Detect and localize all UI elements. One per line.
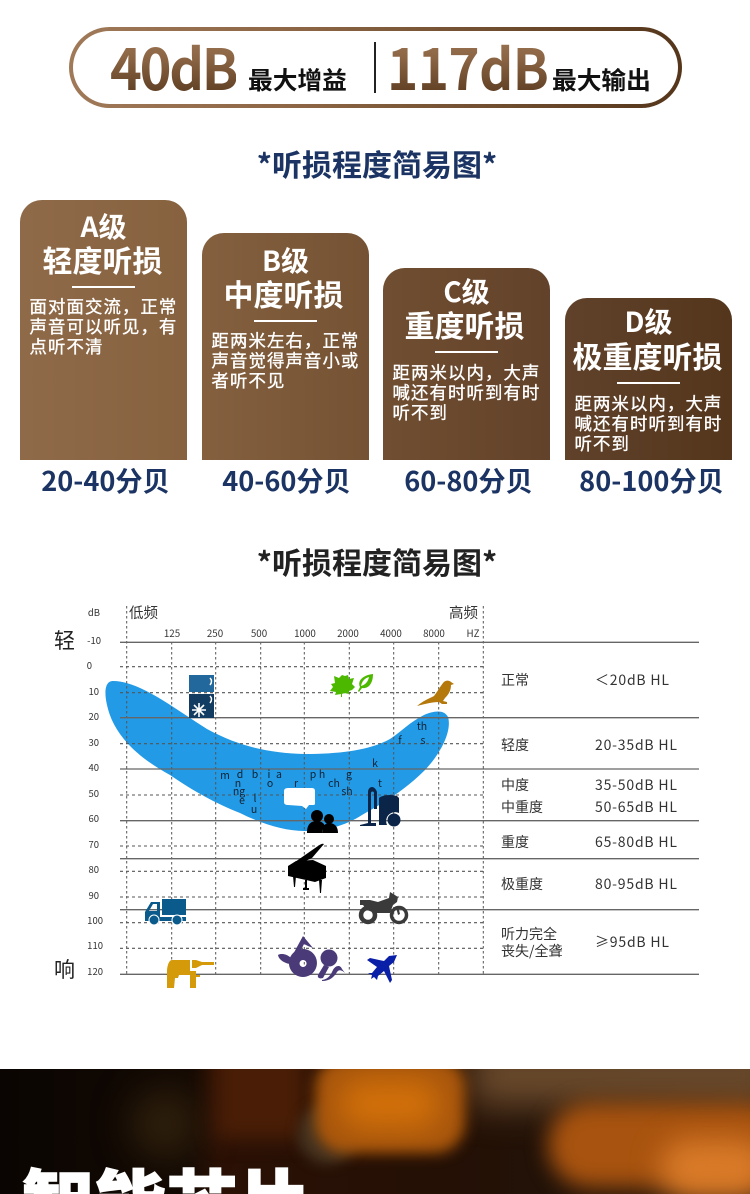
phonemes: a	[276, 767, 282, 782]
axis labels: frequency: 1000	[294, 626, 316, 640]
phonemes: ch	[328, 776, 340, 791]
axis labels: dB	[87, 605, 103, 978]
speech banana	[105, 681, 449, 831]
phonemes: r	[294, 776, 299, 791]
label: 20-40 dB: 20-40分贝	[41, 459, 170, 499]
grade D description	[574, 391, 722, 456]
grade A description	[30, 294, 177, 359]
axis labels: dB: 10	[88, 684, 99, 698]
axis labels: dB: -10	[87, 633, 101, 647]
grade A name: 轻度听损	[42, 237, 162, 281]
panel: grade B	[202, 233, 369, 460]
phonemes: h	[319, 767, 325, 782]
icon: grand piano	[288, 844, 326, 893]
icon: fridge	[189, 675, 214, 718]
phonemes: b	[252, 767, 258, 782]
axis labels: dB: 50	[88, 786, 99, 800]
axis labels: dB: 80	[88, 862, 99, 876]
axis labels: dB: 20	[88, 709, 99, 723]
axis labels: frequency: 4000	[380, 626, 402, 640]
axis labels: dB: 60	[88, 811, 99, 825]
row: mild	[501, 735, 678, 755]
grade A description: 点听不清	[30, 334, 103, 359]
grade C name: 重度听损	[404, 302, 524, 346]
row: profound	[501, 874, 678, 894]
icon: leaves	[330, 674, 373, 697]
phonemes: p	[310, 767, 316, 782]
axis labels: frequency: 250	[207, 626, 223, 640]
row: profound: 80-95dB HL	[595, 874, 678, 894]
chart: audiogram	[54, 602, 699, 988]
phonemes: ng	[233, 784, 245, 799]
grade C description: 听不到	[392, 400, 448, 425]
row: severe: 65-80dB HL	[595, 832, 678, 852]
label: high frequency: 高频	[449, 602, 478, 623]
heading: audiogram: *听损程度简易图*	[257, 539, 497, 583]
axis labels: dB: 90	[88, 888, 99, 902]
grade A title: A级	[81, 206, 126, 246]
grade D description: 距两米以内，大声	[574, 391, 722, 416]
grade B description: 声音觉得声音小或	[212, 348, 359, 373]
row: severe	[501, 832, 678, 852]
phonemes	[220, 719, 427, 817]
phonemes: k	[372, 756, 378, 771]
row: moderately severe: 50-65dB HL	[595, 797, 678, 817]
phonemes: sh	[341, 784, 353, 799]
grade C description	[392, 360, 540, 425]
phonemes: l	[254, 791, 257, 806]
phonemes: n	[235, 776, 241, 791]
grade A description: 面对面交流，正常	[30, 294, 177, 319]
axis labels: frequency: HZ	[466, 626, 480, 640]
row: profound: 极重度	[501, 874, 543, 894]
axis labels: dB: 120	[87, 964, 103, 978]
icon: motorcycle	[360, 892, 406, 922]
phonemes: o	[267, 776, 273, 791]
spec: max output label: 最大输出	[552, 61, 651, 97]
label: 80-100 dB: 80-100分贝	[579, 459, 724, 499]
axis labels: frequency: 2000	[337, 626, 359, 640]
phonemes: t	[378, 776, 382, 791]
label: loud: 响	[54, 954, 75, 984]
row: normal: ＜20dB HL	[595, 670, 670, 690]
icon: music and microphone	[278, 936, 345, 981]
divider	[617, 382, 680, 384]
axis labels: dB: 0	[87, 658, 92, 672]
row: total loss	[501, 924, 670, 961]
row: moderate: 中度	[501, 775, 529, 795]
label: 40-60 dB: 40-60分贝	[222, 459, 351, 499]
phonemes: g	[346, 767, 352, 782]
grade C description: 距两米以内，大声	[392, 360, 540, 385]
panel: grade D	[565, 298, 732, 460]
phonemes: e	[239, 793, 245, 808]
icon: airplane	[367, 955, 397, 983]
phonemes: m	[220, 768, 230, 783]
row: moderately severe	[501, 797, 678, 817]
badge: gain and output specs	[69, 27, 682, 108]
icon: vacuum cleaner	[360, 787, 400, 826]
icon: truck	[145, 899, 186, 925]
icon: people	[307, 810, 338, 833]
phonemes: f	[398, 733, 402, 748]
grade C description: 喊还有时听到有时	[392, 380, 540, 405]
axis labels: dB: 70	[88, 837, 99, 851]
spec: 117dB value: 117dB	[387, 25, 548, 107]
axis labels: frequency: 8000	[423, 626, 445, 640]
divider	[254, 320, 317, 322]
panel: grade A	[20, 200, 187, 460]
spec: 40dB value: 40dB	[110, 25, 236, 107]
row: total loss: ≥95dB HL	[595, 932, 670, 952]
axis labels: dB: 110	[87, 938, 103, 952]
icon: drill	[167, 960, 214, 988]
phonemes: u	[251, 802, 257, 817]
axis labels: dB: 40	[88, 760, 99, 774]
grade C title: C级	[443, 271, 490, 311]
grade D description: 喊还有时听到有时	[574, 411, 722, 436]
spec: max gain label: 最大增益	[248, 61, 347, 97]
grade B description	[212, 328, 359, 393]
heading: hearing loss levels: *听损程度简易图*	[257, 141, 497, 185]
axis labels: dB: 30	[88, 735, 99, 749]
icon: speech bubble	[284, 788, 315, 809]
phonemes: s	[421, 733, 426, 748]
axis labels: frequency: 500	[251, 626, 267, 640]
table: hearing loss classification	[501, 670, 678, 961]
phonemes: d	[237, 767, 243, 782]
grade B name: 中度听损	[224, 271, 344, 315]
grade B title: B级	[262, 240, 309, 280]
grade D title: D级	[624, 301, 672, 341]
row: normal	[501, 670, 670, 690]
row: normal: 正常	[501, 670, 529, 690]
axis labels: frequency	[164, 626, 480, 640]
row: moderate	[501, 775, 678, 795]
grade D name: 极重度听损	[572, 333, 722, 377]
grade B description: 距两米左右，正常	[212, 328, 359, 353]
axis labels: dB: 100	[87, 913, 103, 927]
divider	[374, 42, 376, 93]
row: total loss: 听力完全	[501, 924, 557, 944]
grade B description: 者听不见	[212, 368, 285, 393]
label: soft: 轻	[54, 625, 75, 655]
phonemes: th	[417, 719, 427, 734]
grade D description: 听不到	[574, 431, 630, 456]
divider	[72, 286, 135, 288]
photo banner: blurred orange bokeh	[0, 1069, 750, 1194]
row: mild: 轻度	[501, 735, 529, 755]
divider	[435, 351, 498, 353]
label: 60-80 dB: 60-80分贝	[404, 459, 533, 499]
grade A description: 声音可以听见，有	[30, 314, 177, 339]
grid lines	[120, 606, 699, 974]
icon: bird	[417, 681, 454, 706]
label: low frequency: 低频	[129, 602, 158, 623]
panel: grade C	[383, 268, 550, 460]
axis labels: dB: dB	[88, 605, 100, 619]
row: moderately severe: 中重度	[501, 797, 543, 817]
row: moderate: 35-50dB HL	[595, 775, 678, 795]
axis labels: frequency: 125	[164, 626, 180, 640]
row: total loss: 丧失/全聋	[501, 941, 562, 961]
phonemes: i	[268, 767, 271, 782]
row: severe: 重度	[501, 832, 529, 852]
row: mild: 20-35dB HL	[595, 735, 678, 755]
